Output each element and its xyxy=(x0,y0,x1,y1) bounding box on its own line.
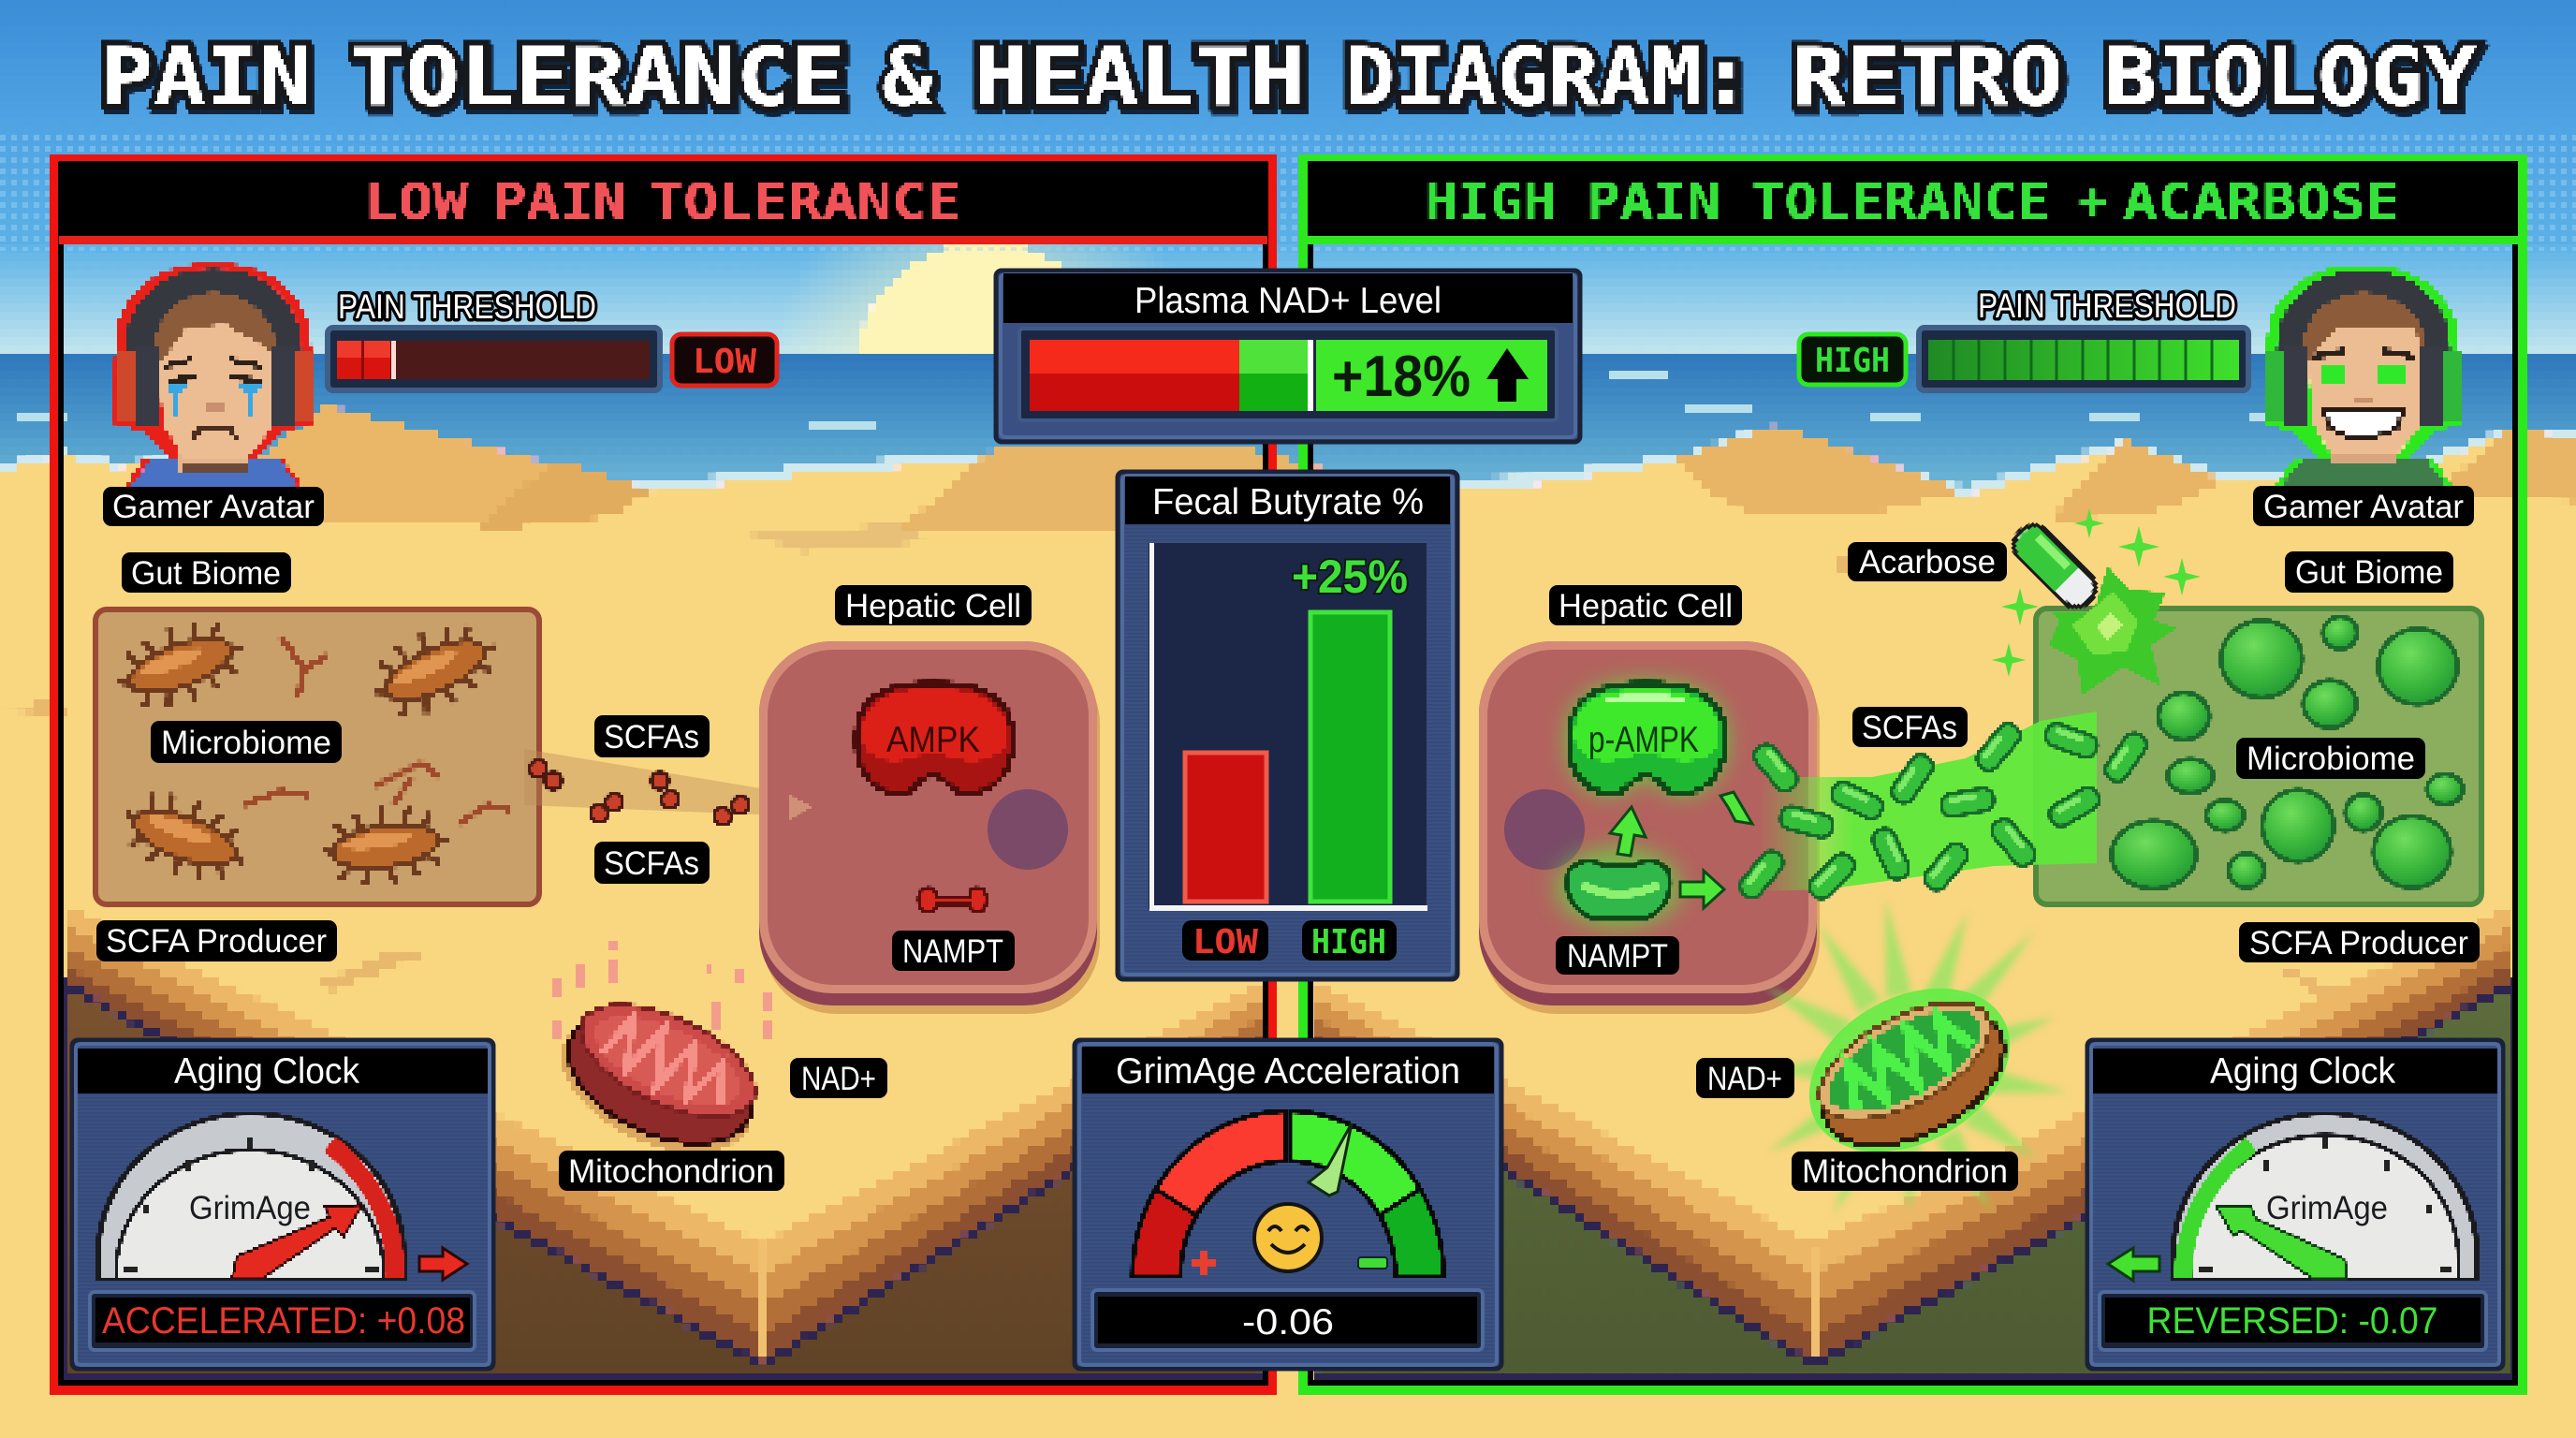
label: gut biome left: Gut Biome xyxy=(131,555,281,592)
needle xyxy=(1309,1123,1352,1196)
arrow: nampt to p-ampk xyxy=(1610,807,1646,856)
readout: reversed xyxy=(2100,1292,2486,1350)
minus sign xyxy=(1358,1257,1387,1269)
readout: -0.06 xyxy=(1092,1290,1483,1350)
heading: low pain tolerance xyxy=(363,172,961,231)
readout: accelerated xyxy=(90,1292,475,1350)
badge: high: HIGH xyxy=(1815,342,1890,380)
badge: high xyxy=(1799,334,1906,385)
icon: smiley xyxy=(1254,1204,1322,1271)
value: +18%: +18% xyxy=(1332,345,1471,409)
label: hepatic cell left: Hepatic Cell xyxy=(845,588,1021,624)
bar chart xyxy=(1149,543,1427,911)
plus sign xyxy=(1192,1251,1216,1275)
nucleus xyxy=(1504,789,1585,870)
arrow: accelerating right xyxy=(419,1248,467,1280)
icon: mitochondrion low xyxy=(541,939,778,1180)
label: microbiome right: Microbiome xyxy=(2247,741,2415,777)
label: mitochondrion left: Mitochondrion xyxy=(568,1153,774,1190)
icon: sad gamer avatar xyxy=(113,263,314,489)
title: PAIN xyxy=(101,31,311,125)
panel: fecal butyrate chart xyxy=(1118,472,1457,979)
heading: low pain tolerance: PAIN xyxy=(493,172,626,231)
badge: low xyxy=(672,334,777,386)
nucleus xyxy=(988,789,1068,870)
badge: low: LOW xyxy=(693,343,756,381)
burst xyxy=(2049,566,2176,695)
gauge label right: GrimAge xyxy=(2266,1190,2388,1226)
label: scfas upper left: SCFAs xyxy=(604,719,699,756)
label: hepatic cell right: Hepatic Cell xyxy=(1559,588,1733,624)
panel: hepatic cell high xyxy=(1479,641,1820,1014)
label: mitochondrion right: Mitochondrion xyxy=(1802,1153,2008,1190)
gauge: acceleration arc xyxy=(1133,1111,1443,1276)
title: & xyxy=(882,31,932,125)
title: RETRO xyxy=(1792,31,2063,125)
title: HEALTH xyxy=(973,31,1305,125)
panel: grimage acceleration xyxy=(1075,1040,1501,1369)
label: nampt left: NAMPT xyxy=(902,933,1003,970)
pain threshold caption left: PAIN THRESHOLD xyxy=(338,287,596,326)
bar: high xyxy=(1310,612,1390,902)
icon: happy gamer avatar xyxy=(2263,265,2461,487)
heading: fecal butyrate: Fecal Butyrate % xyxy=(1152,482,1424,522)
label: gamer avatar right: Gamer Avatar xyxy=(2263,489,2464,525)
readout: accelerated: ACCELERATED: +0.08 xyxy=(102,1300,465,1342)
label: scfas right: SCFAs xyxy=(1862,710,1957,746)
enzyme: p-ampk glowing: p-AMPK xyxy=(1588,720,1699,760)
glow rays xyxy=(1757,897,2069,1221)
bar: nad+ level xyxy=(1019,329,1557,420)
panel: aging clock reversed xyxy=(2087,1040,2503,1369)
label: scfas lower left: SCFAs xyxy=(604,845,699,882)
scfa stream: green flow with rods xyxy=(1736,712,2150,902)
readout: -0.06: -0.06 xyxy=(1242,1302,1334,1343)
label: nampt right: NAMPT xyxy=(1567,938,1668,975)
enzyme: ampk xyxy=(856,683,1013,793)
nad+ particles fading xyxy=(550,939,770,1039)
arrow: p-ampk to right xyxy=(1720,792,1752,824)
left panel floor: terraced canyon xyxy=(64,905,1263,1379)
pain threshold meter: high xyxy=(1799,286,2248,390)
microbes: green blobs xyxy=(2112,617,2463,888)
right panel floor: terraced canyon xyxy=(1315,905,2512,1379)
enzyme: nampt glowing xyxy=(1557,848,1680,927)
enzyme: ampk: AMPK xyxy=(886,720,980,760)
heading: high pain tolerance plus acarbose xyxy=(1425,172,2400,231)
halftone band in the sky xyxy=(0,129,2576,251)
label: scfa producer left: SCFA Producer xyxy=(106,923,327,960)
gauge label: GrimAge xyxy=(189,1190,311,1226)
heading: low pain tolerance: LOW xyxy=(363,172,469,231)
scfa haze xyxy=(524,749,805,816)
gauge: grimage reversed xyxy=(2171,1111,2480,1281)
label: scfa producer right: SCFA Producer xyxy=(2249,925,2468,961)
enzyme: p-ampk glowing xyxy=(1569,683,1725,793)
heading: high pain tolerance plus acarbose: ACARBOSE xyxy=(2123,172,2400,231)
label: acarbose: Acarbose xyxy=(1859,544,1996,580)
pill xyxy=(2007,519,2102,614)
title xyxy=(101,31,2477,125)
label: gut biome right: Gut Biome xyxy=(2295,554,2443,591)
axis label: low xyxy=(1182,920,1268,961)
label: microbiome left: Microbiome xyxy=(161,725,331,761)
panel: aging clock accelerated xyxy=(72,1040,493,1369)
panel: low pain tolerance frame and heading xyxy=(54,159,1272,1390)
label: gamer avatar left: Gamer Avatar xyxy=(112,489,315,525)
panel: gut biome high xyxy=(2036,609,2481,904)
heading: high pain tolerance plus acarbose: TOLERANCE xyxy=(1751,172,2050,231)
panel: gut biome low xyxy=(95,607,805,904)
gauge: grimage accelerated xyxy=(95,1111,406,1281)
pain threshold meter: low xyxy=(328,287,777,390)
arrow: scfa particles low xyxy=(530,760,812,825)
heading: high pain tolerance plus acarbose: PAIN xyxy=(1587,172,1720,231)
arrow: nampt to right xyxy=(1680,871,1724,908)
heading: high pain tolerance plus acarbose: HIGH xyxy=(1425,172,1556,231)
title: BIOLOGY xyxy=(2104,31,2477,125)
pain threshold caption right: PAIN THRESHOLD xyxy=(1978,286,2236,325)
sparkles xyxy=(1992,508,2201,677)
heading: low pain tolerance: TOLERANCE xyxy=(649,172,961,231)
readout: reversed: REVERSED: -0.07 xyxy=(2147,1300,2437,1342)
panel: plasma nad+ level xyxy=(996,271,1580,442)
heading: grimage acceleration: GrimAge Acceleration xyxy=(1116,1051,1460,1092)
panel: hepatic cell low xyxy=(759,641,1100,1014)
heading: aging clock right: Aging Clock xyxy=(2210,1051,2395,1092)
label: nad+ right: NAD+ xyxy=(1707,1061,1782,1097)
label: nad+ left: NAD+ xyxy=(801,1061,876,1097)
bacteria: spiky bugs xyxy=(108,607,510,895)
axis label: high: HIGH xyxy=(1311,923,1386,961)
heading: plasma nad+ level: Plasma NAD+ Level xyxy=(1134,281,1442,321)
panel: high pain tolerance frame and heading xyxy=(1303,159,2523,1390)
enzyme: nampt small xyxy=(919,888,987,911)
title: DIAGRAM: xyxy=(1344,31,1752,125)
title: TOLERANCE xyxy=(350,31,846,125)
heading: high pain tolerance plus acarbose: + xyxy=(2078,172,2108,231)
value: +25%: +25% xyxy=(1292,550,1408,603)
icon: mitochondrion high with rays xyxy=(1757,897,2069,1221)
heading: aging clock: Aging Clock xyxy=(174,1051,359,1092)
arrow: reversing left xyxy=(2108,1248,2159,1281)
icon: up arrow xyxy=(1486,348,1529,402)
axis label: low: LOW xyxy=(1193,923,1258,961)
icon: acarbose pill with burst xyxy=(1992,508,2201,695)
bar: low xyxy=(1185,753,1266,902)
